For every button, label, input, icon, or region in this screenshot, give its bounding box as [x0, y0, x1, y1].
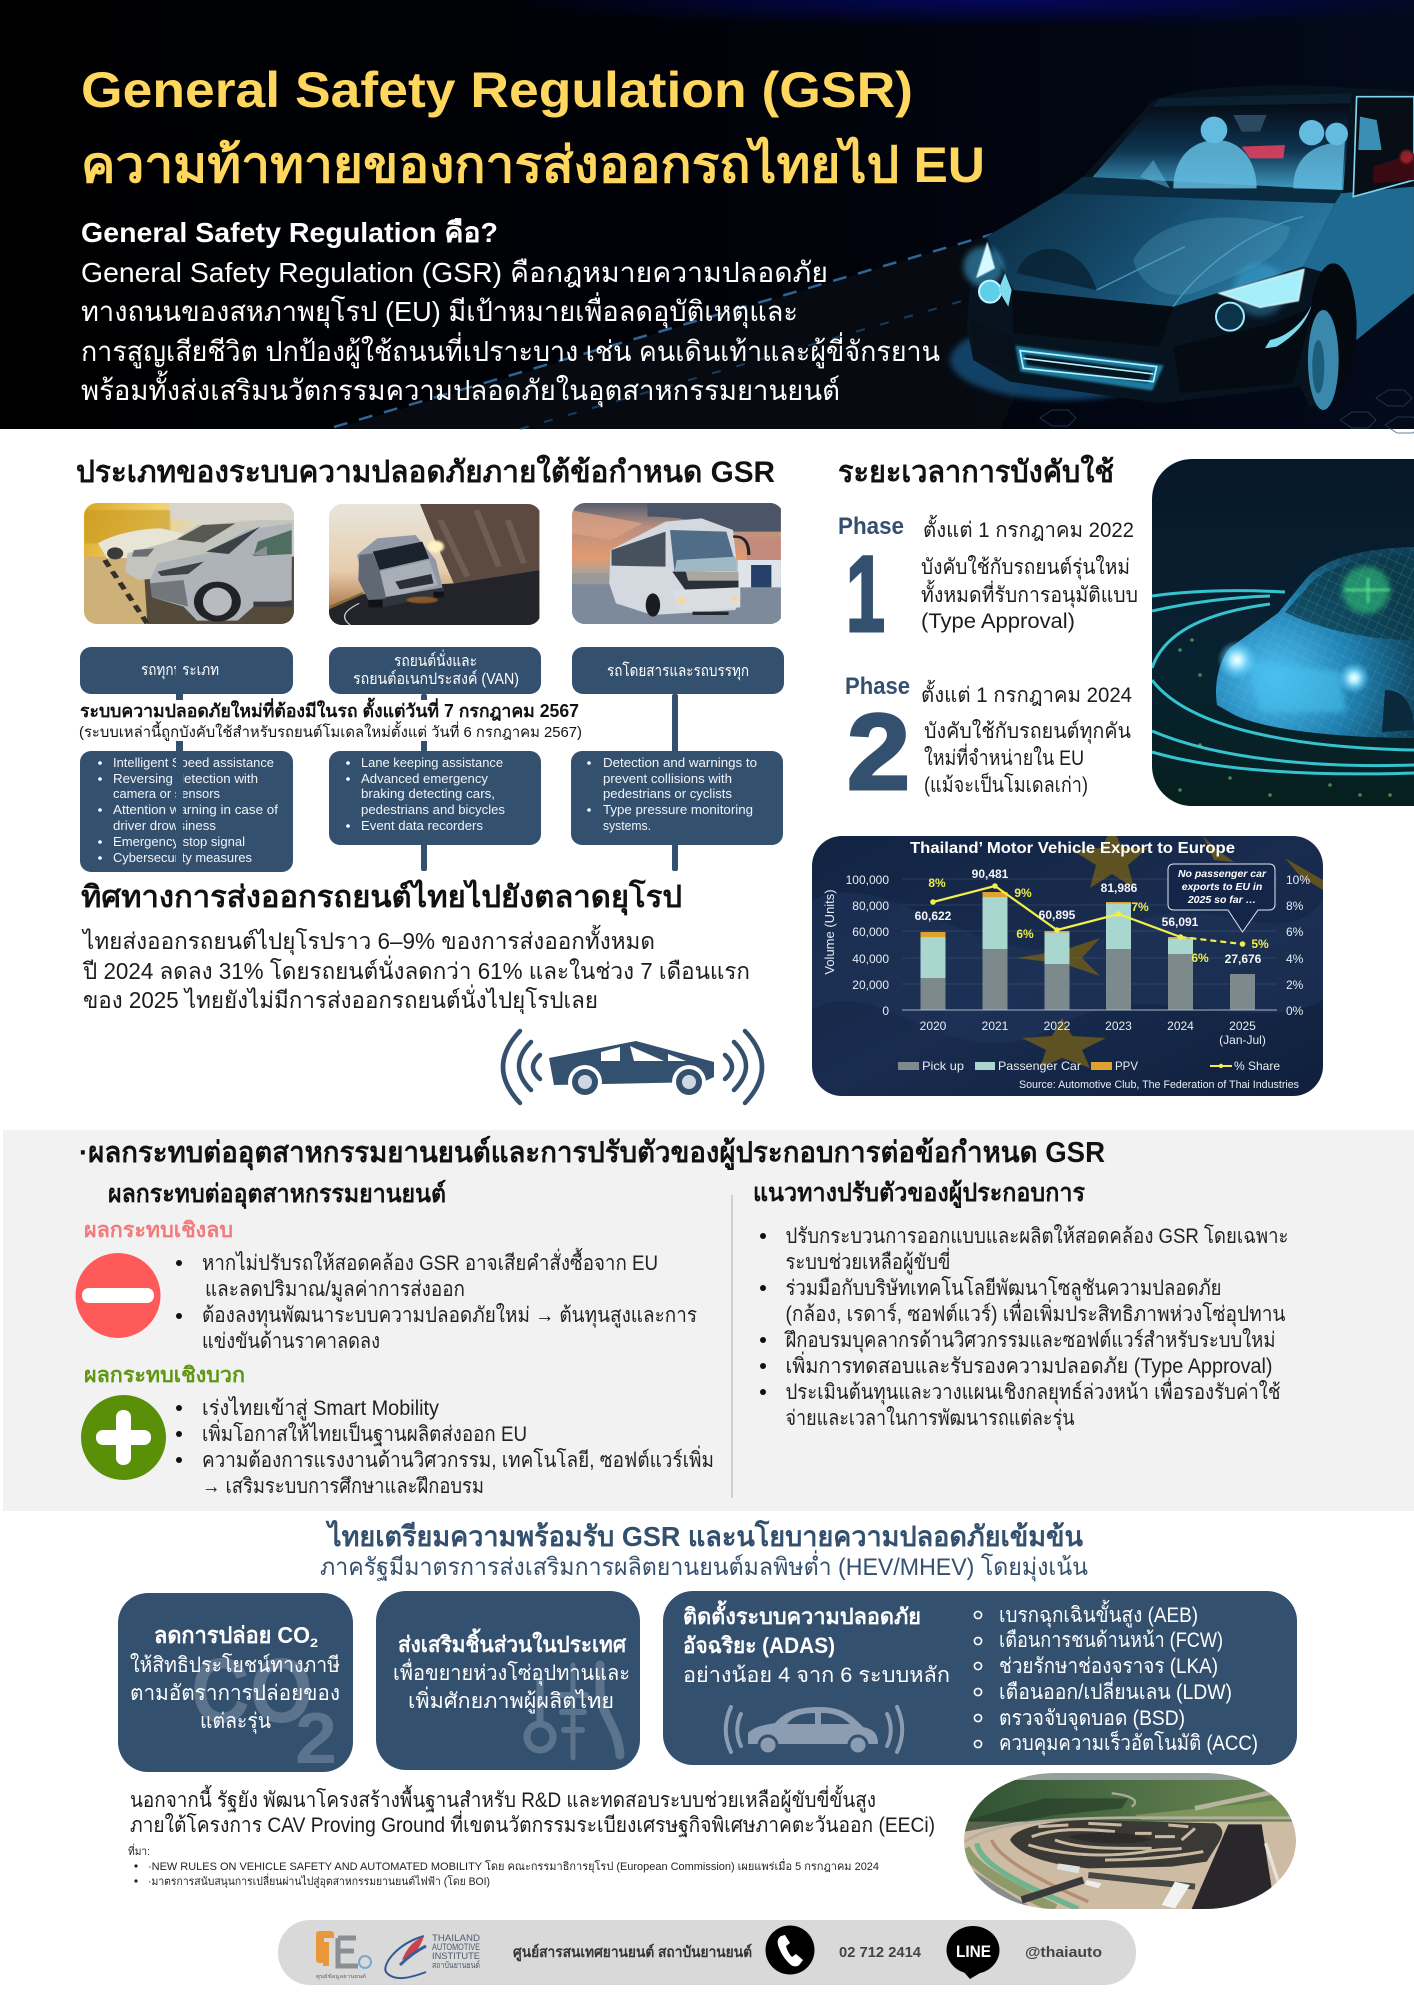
list: all vehicle systems: camera or sensors	[113, 786, 220, 801]
phase 2: บังคับใช้กับรถยนต์ทุกคัน	[924, 719, 1131, 744]
list: bus and truck systems: systems.	[603, 818, 651, 833]
car body	[967, 85, 1414, 407]
logo: Thailand Automotive Institute: THAILAND	[432, 1933, 481, 1943]
runway	[1192, 1824, 1273, 1909]
legend: Pick up	[922, 1059, 964, 1073]
list: passenger car and van systems: Advanced emergency	[361, 771, 488, 786]
card: ADAS: อย่างน้อย 4 จาก 6 ระบบหลัก	[683, 1664, 950, 1687]
list: bus and truck systems: pedestrians or cyclists	[603, 786, 732, 801]
text: new systems required from 7 July 2567	[78, 697, 584, 741]
photo: coach bus	[570, 503, 781, 625]
list: all vehicle systems: Intelligent Speed assistance	[113, 755, 274, 770]
icon: LINE	[946, 1926, 1000, 1979]
card: reduce CO2: ให้สิทธิประโยชน์ทางภาษี	[130, 1653, 340, 1677]
phase 2: 2	[847, 691, 910, 812]
volume labels: 27,676	[1225, 952, 1262, 966]
share labels: 7%	[1131, 900, 1149, 914]
photo: proving ground track	[962, 1772, 1298, 1912]
car glow	[950, 320, 1177, 400]
volume labels: 60,622	[915, 909, 952, 923]
panel: impact and adaptation	[3, 1130, 1414, 1511]
card: reduce CO2: 2	[310, 1636, 318, 1650]
share labels	[928, 876, 1269, 965]
sources	[128, 1843, 879, 1888]
card: ADAS: ติดตั้งระบบความปลอดภัย	[683, 1600, 921, 1629]
legend: % Share	[1234, 1059, 1280, 1073]
label: all vehicles: รถทุกประเภท	[141, 662, 219, 680]
phase 1	[838, 513, 1138, 654]
phase 2: ใหม่ที่จำหน่ายใน EU	[924, 743, 1084, 770]
intro text block: พร้อมทั้งส่งเสริมนวัตกรรมความปลอดภัยในอุตสาหกรรมยานยนต์	[81, 370, 840, 408]
text: new systems required from 7 July 2567: (ระบบเหล่านี้ถูกบังคับใช้สำหรับรถยนต์โมเดลใหม่ตั้งแต่ วันที่ 6 กรกฎาคม 2567)	[79, 721, 582, 741]
card: reduce CO2	[118, 1593, 353, 1779]
phase 2: Phase	[845, 673, 910, 700]
icon: tools	[527, 1665, 620, 1758]
cabin seats	[1140, 117, 1348, 190]
card: promote local parts	[376, 1591, 640, 1770]
front wheel	[1308, 263, 1357, 410]
negative impact list: และลดปริมาณ/มูลค่าการส่งออก	[205, 1278, 465, 1302]
left axis: 60,000	[852, 925, 889, 939]
adaptation list: ร่วมมือกับบริษัทเทคโนโลยีพัฒนาโซลูชันความปลอดภัย	[786, 1276, 1222, 1301]
year labels: (Jan-Jul)	[1219, 1033, 1266, 1047]
icon: plus	[81, 1395, 166, 1480]
label: buses and trucks	[572, 647, 784, 694]
photo: van on road	[328, 504, 539, 627]
volume labels: 90,481	[972, 867, 1009, 881]
list: all vehicle systems: driver drowsiness	[113, 818, 216, 833]
logo: iE: ศูนย์ข้อมูลยานยนต์	[316, 1973, 366, 1980]
intro text block	[81, 217, 940, 408]
phase 2: (แม้จะเป็นโมเดลเก่า)	[924, 771, 1088, 797]
list: passenger car and van systems: Event data recorders	[361, 818, 483, 833]
adaptation list: ประเมินต้นทุนและวางแผนเชิงกลยุทธ์ล่วงหน้า เพื่อรองรับค่าใช้	[786, 1377, 1280, 1405]
subheading: industry impact: ผลกระทบต่ออุตสาหกรรมยานยนต์	[108, 1179, 446, 1210]
logo: Thailand Automotive Institute: AUTOMOTIVE	[432, 1942, 480, 1952]
logo: Thailand Automotive Institute: INSTITUTE	[432, 1951, 480, 1961]
heading: Thailand prepares	[320, 1519, 1088, 1582]
right axis: 6%	[1286, 925, 1304, 939]
label: passenger cars and van: รถยนต์นั่งและ	[394, 649, 477, 670]
label: all vehicles	[80, 647, 293, 694]
heading: safety system types: ประเภทของระบบความปลอดภัยภายใต้ข้อกำหนด GSR	[76, 454, 775, 489]
label: passenger cars and van: รถยนต์อเนกประสงค์ (VAN)	[353, 669, 519, 688]
gridlines	[902, 879, 1277, 984]
chart: Thailand motor vehicle export to Europe	[812, 826, 1323, 1096]
source: Source: Automotive Club, The Federation of Thai Industries	[1019, 1079, 1299, 1091]
card: promote local parts: เพิ่มศักยภาพผู้ผลิตไทย	[408, 1686, 614, 1714]
stacked bars	[920, 892, 1255, 1010]
subheading: operator adaptation: แนวทางปรับตัวของผู้ประกอบการ	[753, 1179, 1086, 1209]
text: new systems required from 7 July 2567: ระบบความปลอดภัยใหม่ที่ต้องมีในรถ ตั้งแต่วันที่ 7 กรกฎาคม 2567	[80, 697, 579, 721]
heading: Thailand prepares: ไทยเตรียมความพร้อมรับ GSR และนโยบายความปลอดภัยเข้มข้น	[325, 1519, 1083, 1552]
connector: first column over text	[176, 647, 183, 872]
card: ADAS: อัจฉริยะ (ADAS)	[683, 1633, 835, 1658]
adaptation list: ปรับกระบวนการออกแบบและผลิตให้สอดคล้อง GSR โดยเฉพาะ	[786, 1224, 1288, 1248]
share labels: 6%	[1191, 951, 1209, 965]
panel: header banner	[0, 0, 1414, 433]
ADAS list: ช่วยรักษาช่องจราจร (LKA)	[999, 1655, 1218, 1678]
text: proving ground: นอกจากนี้ รัฐยัง พัฒนาโครงสร้างพื้นฐานสำหรับ R&D และทดสอบระบบช่วยเหลือผู้ขับขี่ขั้นสูง	[130, 1785, 876, 1813]
negative impact list	[176, 1248, 697, 1353]
icon: phone	[766, 1926, 814, 1974]
axis title: Volume (Units)	[822, 889, 837, 975]
phase 2	[845, 673, 1132, 812]
icon: car with sensor waves	[503, 1031, 762, 1103]
card: promote local parts: ส่งเสริมชิ้นส่วนในประเทศ	[398, 1628, 627, 1657]
list: all vehicle systems	[80, 751, 293, 872]
watermark: CO2: CO	[191, 1640, 313, 1742]
adaptation list: เพิ่มการทดสอบและรับรองความปลอดภัย (Type Approval)	[786, 1351, 1272, 1378]
logo: Thailand Automotive Institute	[385, 1933, 481, 1978]
text: export summary: ปี 2024 ลดลง 31% โดยรถยนต์นั่งลดกว่า 61% และในช่วง 7 เดือนแรก	[82, 955, 750, 984]
share labels: 9%	[1014, 886, 1032, 900]
logo: Thailand Automotive Institute: สถาบันยานยนต์	[432, 1959, 480, 1970]
volume labels: 56,091	[1162, 915, 1199, 929]
phase 1: (Type Approval)	[921, 610, 1075, 633]
ADAS list: เตือนออก/เปลี่ยนเลน (LDW)	[999, 1677, 1232, 1704]
lower grille glow	[1020, 350, 1158, 387]
share labels: 6%	[1016, 927, 1034, 941]
adaptation list	[760, 1224, 1288, 1431]
positive impact list	[176, 1396, 714, 1498]
phase 1: บังคับใช้กับรถยนต์รุ่นใหม่	[921, 555, 1130, 580]
watermark: CO2	[194, 1658, 334, 1763]
right axis: 4%	[1286, 952, 1304, 966]
LINE handle: @thaiauto	[1025, 1944, 1102, 1961]
title: General Safety Regulation (GSR)	[81, 62, 913, 118]
legend	[898, 1059, 1280, 1073]
card: reduce CO2: ลดการปล่อย CO	[154, 1622, 310, 1648]
intro text block: ทางถนนของสหภาพยุโรป (EU) มีเป้าหมายเพื่อลดอุบัติเหตุและ	[81, 292, 798, 329]
heading: export direction: ทิศทางการส่งออกรถยนต์ไทยไปยังตลาดยุโรป	[81, 878, 682, 916]
text: export summary: ไทยส่งออกรถยนต์ไปยุโรปราว 6–9% ของการส่งออกทั้งหมด	[81, 925, 655, 955]
label: passenger cars and van	[329, 647, 541, 694]
main silver car	[150, 523, 292, 621]
year labels	[920, 1019, 1266, 1047]
positive impact list: เร่งไทยเข้าสู่ Smart Mobility	[202, 1396, 439, 1421]
hood	[987, 193, 1340, 307]
callout: no passenger car exports: No passenger car	[1178, 868, 1267, 880]
year labels: 2023	[1105, 1019, 1132, 1033]
phase 1: ทั้งหมดที่รับการอนุมัติแบบ	[921, 580, 1138, 608]
list: all vehicle systems: Cybersecurity measures	[113, 850, 252, 865]
windshield	[1090, 103, 1350, 190]
left axis: 20,000	[852, 978, 889, 992]
track	[1010, 1820, 1222, 1868]
list: passenger car and van systems: Lane keeping assistance	[361, 755, 503, 770]
logo: iE	[316, 1931, 371, 1980]
left axis	[846, 873, 889, 1018]
list: passenger car and van systems: pedestrians and bicycles	[361, 802, 506, 817]
ADAS list: เบรกฉุกเฉินขั้นสูง (AEB)	[999, 1600, 1198, 1628]
icon: LINE: LINE	[956, 1942, 991, 1961]
share line	[930, 883, 1245, 947]
negative impact label: ผลกระทบเชิงลบ	[84, 1219, 233, 1242]
intro text block: การสูญเสียชีวิต ปกป้องผู้ใช้ถนนที่เปราะบาง เช่น คนเดินเท้าและผู้ขี่จักรยาน	[81, 332, 940, 369]
list: all vehicle systems: Attention warning in case of	[113, 802, 278, 817]
text: export summary	[81, 925, 750, 1014]
negative impact list: แข่งขันด้านราคาลดลง	[202, 1330, 380, 1353]
list: passenger car and van systems	[329, 751, 541, 845]
left axis: 0	[882, 1004, 889, 1018]
text: export summary: ของ 2025 ไทยยังไม่มีการส่งออกรถยนต์นั่งไปยุโรปเลย	[83, 984, 598, 1014]
middle car	[125, 520, 292, 580]
title	[81, 62, 985, 193]
card: ADAS	[663, 1591, 1297, 1765]
year labels: 2020	[920, 1019, 947, 1033]
positive impact label: ผลกระทบเชิงบวก	[84, 1364, 245, 1387]
list: all vehicle systems: Reversing detection with	[113, 771, 258, 786]
roads and roofs	[1022, 1880, 1083, 1900]
right headlight	[1216, 263, 1312, 348]
side window	[1353, 97, 1414, 197]
right axis: 2%	[1286, 978, 1304, 992]
ADAS list	[974, 1600, 1258, 1756]
sources: ·NEW RULES ON VEHICLE SAFETY AND AUTOMATED MOBILITY โดย คณะกรรมาธิการยุโรป (European Commission) เผยแพร่เมื่อ 5 กรกฎาคม 2024	[148, 1858, 879, 1873]
year labels: 2022	[1044, 1019, 1071, 1033]
panel heading: ·ผลกระทบต่ออุตสาหกรรมยานยนต์และการปรับตัวของผู้ประกอบการต่อข้อกำหนด GSR	[79, 1135, 1105, 1170]
list: bus and truck systems: Type pressure monitoring	[603, 802, 753, 817]
text: proving ground: ภายใต้โครงการ CAV Proving Ground ที่เขตนวัตกรรมระเบียงเศรษฐกิจพิเศษภาคตะวันออก (EECi)	[130, 1810, 935, 1837]
adaptation list: (กล้อง, เรดาร์, ซอฟต์แวร์) เพื่อเพิ่มประสิทธิภาพห่วงโซ่อุปทาน	[786, 1299, 1286, 1327]
year labels: 2021	[982, 1019, 1009, 1033]
legend: PPV	[1115, 1059, 1138, 1073]
text: proving ground	[130, 1785, 935, 1837]
icon: car with sensors	[726, 1707, 902, 1754]
list: bus and truck systems	[571, 751, 783, 845]
photo: parked cars	[80, 500, 296, 627]
left axis: 100,000	[846, 873, 889, 887]
positive impact list: → เสริมระบบการศึกษาและฝึกอบรม	[202, 1475, 484, 1498]
negative impact list: หากไม่ปรับรถให้สอดคล้อง GSR อาจเสียคำสั่งซื้อจาก EU	[202, 1248, 658, 1275]
phase 1: 1	[846, 533, 885, 654]
year labels: 2025	[1229, 1019, 1256, 1033]
ADAS list: เตือนการชนด้านหน้า (FCW)	[999, 1629, 1223, 1652]
negative impact list: ต้องลงทุนพัฒนาระบบความปลอดภัยใหม่ → ต้นทุนสูงและการ	[202, 1303, 697, 1328]
text: information centre: ศูนย์สารสนเทศยานยนต์ สถาบันยานยนต์	[513, 1943, 752, 1962]
phase 1: ตั้งแต่ 1 กรกฎาคม 2022	[923, 515, 1134, 542]
list: all vehicle systems: Emergency stop signal	[113, 834, 245, 849]
connectors behind cards	[421, 694, 678, 871]
label: buses and trucks: รถโดยสารและรถบรรทุก	[607, 661, 749, 681]
panel: footer contact bar	[278, 1920, 1136, 1985]
title: ความท้าทายของการส่งออกรถไทยไป EU	[81, 136, 985, 193]
list: bus and truck systems: prevent collisions with	[603, 771, 732, 786]
card: reduce CO2: แต่ละรุ่น	[200, 1710, 271, 1734]
callout: no passenger car exports	[1168, 864, 1275, 932]
intro text block: General Safety Regulation คือ?	[81, 217, 498, 248]
right axis: 10%	[1286, 873, 1310, 887]
ADAS list: ตรวจจับจุดบอด (BSD)	[999, 1707, 1185, 1731]
adaptation list: จ่ายและเวลาในการพัฒนารถแต่ละรุ่น	[786, 1406, 1074, 1431]
sources: ที่มา:	[128, 1843, 150, 1858]
phase 2: ตั้งแต่ 1 กรกฎาคม 2024	[921, 680, 1132, 707]
watermark: CO2: 2	[295, 1699, 337, 1779]
intro text block: General Safety Regulation (GSR) คือกฎหมายความปลอดภัย	[81, 257, 828, 288]
right axis: 0%	[1286, 1004, 1304, 1018]
ADAS list: ควบคุมความเร็วอัตโนมัติ (ACC)	[999, 1729, 1258, 1756]
adaptation list: ฝึกอบรมบุคลากรด้านวิศวกรรมและซอฟต์แวร์สำหรับระบบใหม่	[784, 1328, 1276, 1353]
right axis: 8%	[1286, 899, 1304, 913]
road hex pattern and light streak	[334, 200, 1414, 433]
share labels: 8%	[928, 876, 946, 890]
list: bus and truck systems: Detection and warnings to	[603, 755, 757, 770]
positive impact list: ความต้องการแรงงานด้านวิศวกรรม, เทคโนโลยี, ซอฟต์แวร์เพิ่ม	[202, 1445, 714, 1472]
card: promote local parts: เพื่อขยายห่วงโซ่อุปทานและ	[393, 1658, 630, 1686]
phone number: 02 712 2414	[839, 1944, 922, 1961]
callout: no passenger car exports: exports to EU in	[1182, 881, 1262, 893]
landscaped canal	[965, 1848, 1055, 1909]
image: glowing transparent car	[950, 85, 1414, 410]
phase 1: Phase	[838, 513, 904, 540]
left axis: 40,000	[852, 952, 889, 966]
sources: ·มาตรการสนับสนุนการเปลี่ยนผ่านไปสู่อุตสาหกรรมยานยนต์ไฟฟ้า (โดย BOI)	[148, 1873, 490, 1888]
photo: wireframe car	[1152, 459, 1414, 806]
right axis	[1286, 873, 1310, 1018]
icon: minus	[76, 1253, 160, 1338]
adaptation list: ระบบช่วยเหลือผู้ขับขี่	[786, 1247, 950, 1275]
volume labels: 81,986	[1101, 881, 1138, 895]
legend: Passenger Car	[998, 1059, 1081, 1073]
left axis: 80,000	[852, 899, 889, 913]
grille	[1012, 290, 1173, 347]
positive impact list: เพิ่มโอกาสให้ไทยเป็นฐานผลิตส่งออก EU	[202, 1419, 527, 1446]
heading: enforcement timeline: ระยะเวลาการบังคับใช้	[838, 454, 1114, 489]
left headlight	[963, 242, 1012, 307]
callout: no passenger car exports: 2025 so far …	[1187, 894, 1256, 906]
volume labels: 60,895	[1039, 908, 1076, 922]
card: reduce CO2: ตามอัตราการปล่อยของ	[130, 1682, 340, 1705]
heading: Thailand prepares: ภาครัฐมีมาตรการส่งเสริมการผลิตยานยนต์มลพิษต่ำ (HEV/MHEV) โดยมุ่งเน้น	[320, 1550, 1088, 1582]
list: passenger car and van systems: braking detecting cars,	[361, 786, 495, 801]
year labels: 2024	[1167, 1019, 1194, 1033]
share labels: 5%	[1251, 937, 1269, 951]
chart title: Thailand’ Motor Vehicle Export to Europe	[910, 840, 1235, 857]
white car far	[98, 528, 184, 558]
volume labels	[915, 867, 1262, 966]
